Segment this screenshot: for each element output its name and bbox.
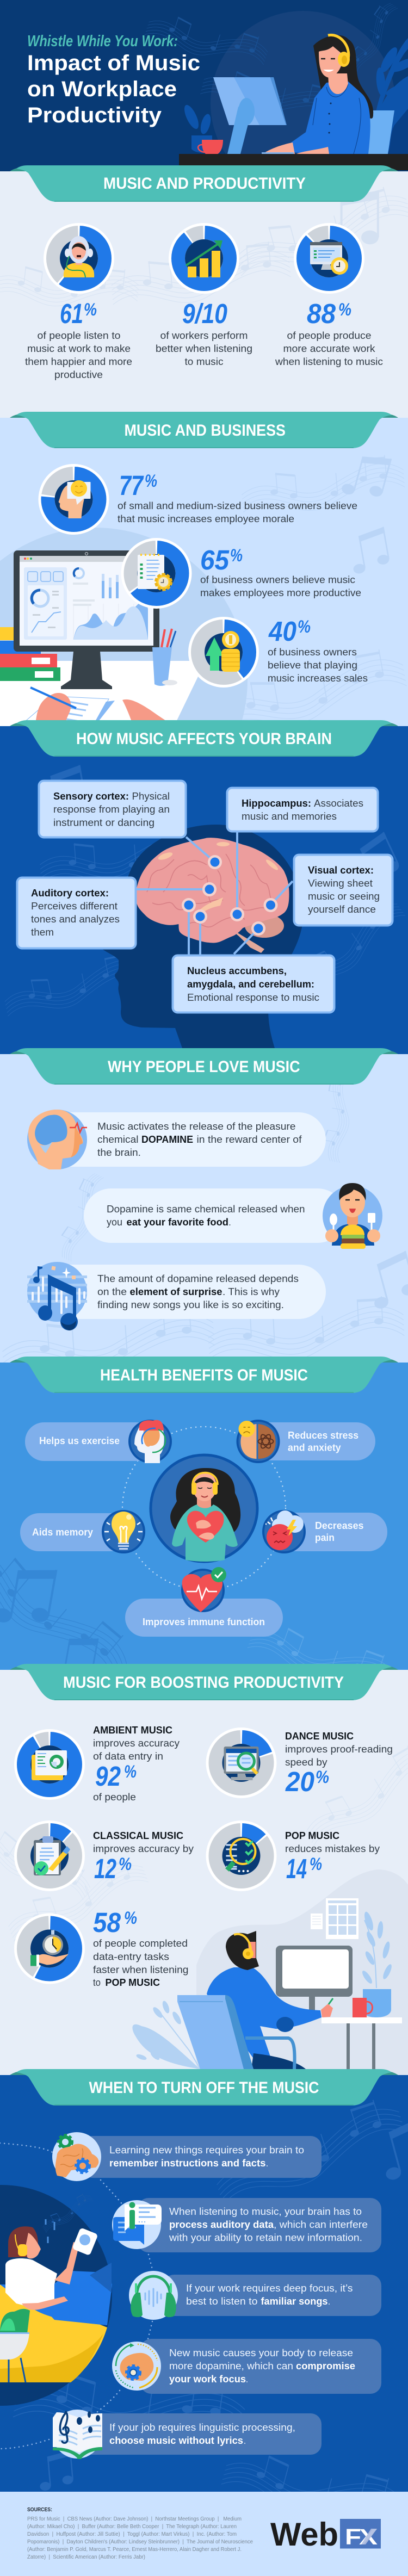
callout: hippocampus [227, 788, 378, 831]
stat: 77 percent: that music increases employee morale [118, 513, 294, 524]
chart: 12 percent donut [14, 1820, 85, 1891]
sources list: (Author: Mikael Cho) | Buffer (Author: Belle Beth Cooper | The Telegraph (Author: Lauren [27, 2523, 237, 2530]
heading: MUSIC FOR BOOSTING PRODUCTIVITY [63, 1674, 344, 1692]
stat: 9 in 10: 9/10 [182, 298, 227, 329]
card: favorite food: . [228, 1217, 231, 1228]
silhouette: head [101, 825, 304, 1048]
card: favorite food: you [107, 1217, 122, 1228]
callout: nucleus accumbens [173, 955, 334, 1013]
heading: HEALTH BENEFITS OF MUSIC [100, 1366, 308, 1384]
card: auditory data: When listening to music, your brain has to [169, 2206, 362, 2217]
pill: aids memory [20, 1513, 129, 1551]
connector lines [137, 832, 293, 955]
panel: header [0, 0, 408, 196]
card: learning new things: . [266, 2158, 268, 2169]
callout: hippocampus: music and memories [242, 811, 337, 822]
text: pop music [285, 1830, 380, 1884]
text: classical music: CLASSICAL MUSIC [93, 1830, 183, 1841]
callout: visual cortex: Viewing sheet [308, 878, 373, 889]
text: 58 percent pop music: data-entry tasks [93, 1952, 169, 1962]
callout: auditory cortex [17, 878, 136, 949]
icon: music notes [27, 1262, 87, 1330]
card: new music: . [246, 2374, 248, 2385]
stat: 65 percent: of business owners believe music [200, 574, 355, 585]
stat: 88 percent: % [338, 300, 351, 319]
card: element of surprise: element of surprise [129, 1286, 222, 1297]
sources list [27, 2516, 253, 2560]
text: 58 percent pop music: of people completed [93, 1938, 188, 1949]
illustration: woman at computer [179, 35, 408, 170]
sources list: Popomaronis) | Dayton Children's (Author: Lindsey Steinbrunner) | The Journal of Neuroscience [27, 2538, 253, 2545]
card: auditory data: process auditory data [169, 2219, 274, 2230]
illustration: brain [138, 839, 288, 953]
stat: 77 percent [118, 470, 357, 524]
card: element of surprise [33, 1265, 326, 1319]
callout: hippocampus: Associates [314, 798, 363, 809]
callout: auditory cortex: tones and analyzes [31, 914, 120, 925]
stat: 88 percent: more accurate work [283, 343, 376, 354]
chart: 92 percent donut [14, 1729, 85, 1800]
text: ambient music: of data entry in [93, 1751, 163, 1762]
callout: visual cortex [294, 855, 393, 926]
text: 58 percent pop music: faster when listening [93, 1965, 188, 1976]
text: dance music: 20 [285, 1766, 314, 1797]
logo: WebFX: F [345, 2524, 361, 2549]
text: ambient music: AMBIENT MUSIC [93, 1725, 172, 1736]
sources list: Zatorre) | Scientific American (Author: Ferris Jabr) [27, 2554, 145, 2560]
text: dance music: speed by [285, 1757, 327, 1768]
card: new music: your work focus [169, 2374, 246, 2385]
card: dopamine [33, 1112, 326, 1167]
callout: sensory cortex [39, 781, 186, 838]
illustration: woman in bean bag [0, 2185, 112, 2406]
icon: music book [53, 2410, 102, 2459]
chart: 40 percent donut [188, 617, 259, 688]
sources list: (Author: Benjamin P. Gold, Marcus T. Pearce, Ernest Mas-Herrero, Alain Dagher and Robert J. [27, 2546, 242, 2553]
text: ambient music: improves accuracy [93, 1738, 180, 1749]
callout: auditory cortex: them [31, 927, 54, 938]
chart: 61 percent donut [44, 223, 114, 294]
heading [10, 1357, 398, 1393]
illustration: man at desk [132, 1898, 402, 2069]
illustration: desk with monitor [0, 550, 206, 726]
stat: 9 in 10: better when listening [156, 343, 252, 354]
logo: WebFX: X [359, 2524, 378, 2549]
stat: 61 percent: productive [54, 369, 103, 380]
card: dopamine: chemical [97, 1134, 138, 1145]
heading: HOW MUSIC AFFECTS YOUR BRAIN [76, 730, 332, 748]
heading [10, 720, 398, 757]
text: dance music: improves proof-reading [285, 1744, 393, 1755]
icon: brain in head [129, 1420, 171, 1463]
icon: light bulb [103, 1511, 144, 1552]
icon: pain face [263, 1510, 305, 1552]
pill: decreases pain: Decreases [315, 1520, 363, 1531]
card: deep focus: . [328, 2296, 330, 2307]
callout: sensory cortex: instrument or dancing [53, 817, 154, 828]
text: pop music: POP MUSIC [285, 1830, 339, 1841]
card: new music: New music causes your body to release [169, 2348, 353, 2358]
heading [10, 2069, 398, 2106]
card: element of surprise: The amount of dopamine released depends [97, 1273, 299, 1284]
text: 58 percent pop music: to [93, 1977, 101, 1988]
logo: WebFX: Web [270, 2516, 338, 2553]
text: 58 percent pop music: 58 [93, 1907, 121, 1938]
card: favorite food [84, 1188, 345, 1243]
card: deep focus: best to listen to [186, 2296, 258, 2307]
card: dopamine: Music activates the release of the pleasure [97, 1121, 296, 1132]
card: new music: compromise [296, 2361, 355, 2371]
card: auditory data: , which can interfere [274, 2219, 368, 2230]
text: dance music [285, 1731, 393, 1797]
callout: sensory cortex: Physical [132, 791, 170, 802]
stat: 65 percent: makes employees more productive [200, 587, 361, 598]
stat: 61 percent: music at work to make [27, 343, 131, 354]
dotted connector [0, 2143, 152, 2449]
callout: nucleus accumbens: Emotional response to music [187, 992, 319, 1003]
text: pop music: % [310, 1854, 322, 1874]
heading: WHY PEOPLE LOVE MUSIC [108, 1058, 300, 1076]
panel: when to turn off the music [0, 2069, 408, 2535]
pill: helps us exercise: Helps us exercise [39, 1435, 120, 1446]
stat: 61 percent: of people listen to [37, 330, 121, 341]
heading [10, 1048, 398, 1085]
callout: visual cortex: Visual cortex: [308, 865, 374, 876]
heading: MUSIC AND PRODUCTIVITY [103, 175, 306, 193]
stat: 9 in 10: of workers perform [160, 330, 248, 341]
icon: brain with arrows [112, 2342, 161, 2391]
chart: 20 percent donut [206, 1727, 276, 1798]
title: on Workplace [27, 77, 177, 101]
text: classical music: 12 [94, 1853, 116, 1884]
pill: reduces stress: Reduces stress [288, 1430, 358, 1441]
panel: music for boosting productivity [0, 1664, 408, 2075]
title: Productivity [27, 103, 162, 127]
panel: why people love music [0, 1048, 408, 1379]
callout: hippocampus: Hippocampus: [242, 798, 311, 809]
card: dopamine: in the reward center of [197, 1134, 302, 1145]
icon: heart with check [182, 1567, 226, 1612]
illustration: woman with heart [151, 1455, 257, 1562]
stat: 77 percent: 77 [119, 470, 144, 501]
panel: sources footer [0, 2492, 408, 2576]
heading: WHEN TO TURN OFF THE MUSIC [89, 2079, 319, 2097]
text: classical music: % [119, 1854, 132, 1874]
dotted ring [122, 1427, 286, 1590]
stat: 77 percent: % [145, 471, 157, 491]
icon: head with pulse [27, 1110, 87, 1169]
callout: visual cortex: music or seeing [308, 891, 380, 902]
chart: 77 percent donut [38, 464, 109, 535]
stat: 61 percent: 61 [60, 298, 83, 329]
text: ambient music: of people [93, 1792, 136, 1803]
heading [10, 412, 398, 448]
card: new music [140, 2339, 381, 2394]
card: auditory data [138, 2198, 381, 2252]
pill: improves immune function [125, 1599, 283, 1637]
text: ambient music: % [124, 1762, 137, 1781]
brain markers [182, 855, 277, 936]
text: dance music: DANCE MUSIC [285, 1731, 354, 1742]
stat: 88 percent [275, 298, 383, 367]
pill: decreases pain [277, 1513, 387, 1551]
pill: reduces stress: and anxiety [288, 1442, 341, 1453]
text: pop music: reduces mistakes by [285, 1843, 380, 1854]
card: dopamine: the brain. [97, 1147, 141, 1158]
pill: helps us exercise [25, 1422, 156, 1461]
stat: 88 percent: when listening to music [275, 356, 383, 367]
stat: 88 percent: of people produce [287, 330, 371, 341]
card: linguistic processing: If your job requires linguistic processing, [109, 2422, 295, 2433]
stat: 40 percent: % [298, 617, 311, 636]
callout: nucleus accumbens: amygdala, and cerebellum: [187, 979, 314, 990]
stat: 40 percent: believe that playing [268, 660, 357, 671]
stat: 40 percent: music increases sales [268, 673, 368, 684]
stat: 9 in 10 [156, 298, 252, 367]
card: dopamine: DOPAMINE [141, 1134, 193, 1145]
card: linguistic processing: choose music without lyrics [109, 2435, 243, 2446]
sources heading: SOURCES: [27, 2506, 52, 2513]
chart: 65 percent donut [121, 538, 191, 609]
sources list: Davidson | Huffpost (Author: Jill Suttie) | Toggl (Author: Mart Virkus) | Inc. (Author: Tom [27, 2531, 237, 2537]
callout: auditory cortex: Perceives different [31, 901, 118, 912]
card: favorite food: Dopamine is same chemical released when [107, 1204, 305, 1215]
card: learning new things [82, 2136, 322, 2178]
card: deep focus: familiar songs [261, 2296, 327, 2307]
card: learning new things: Learning new things requires your brain to [109, 2145, 304, 2156]
text: 58 percent pop music: % [124, 1908, 137, 1928]
card: favorite food: eat your favorite food [126, 1217, 228, 1228]
heading [10, 165, 398, 202]
chart: 88 percent donut [294, 223, 364, 294]
stat: 40 percent: of business owners [268, 647, 357, 658]
panel: health benefits of music [0, 1357, 408, 1701]
pill: reduces stress [245, 1422, 375, 1460]
chart: 58 percent donut [14, 1914, 85, 1984]
icon: man eating burger [323, 1183, 382, 1249]
callout: auditory cortex: Auditory cortex: [31, 888, 109, 899]
card: element of surprise: on the [97, 1286, 127, 1297]
text: 58 percent pop music: POP MUSIC [106, 1977, 160, 1988]
stat: 9 in 10: to music [185, 356, 223, 367]
card: learning new things: remember instructions and facts [109, 2158, 265, 2169]
logo: WebFX [270, 2516, 381, 2553]
callout: sensory cortex: Sensory cortex: [53, 791, 129, 802]
panel: music and business [0, 412, 408, 832]
pill: decreases pain: pain [315, 1532, 335, 1543]
sources list: PRS for Music | CBS News (Author: Dave Johnson) | Northstar Meetings Group | Medium [27, 2516, 242, 2522]
stat: 77 percent: of small and medium-sized business owners believe [118, 500, 357, 511]
icon: brain and gears [52, 2132, 101, 2181]
chart: 9 in 10 donut [169, 223, 239, 294]
text: pop music: 14 [286, 1853, 307, 1884]
stat: 61 percent: them happier and more [25, 356, 132, 367]
title: Impact of Music [27, 51, 200, 75]
stat: 40 percent: 40 [268, 616, 296, 647]
card: linguistic processing: . [244, 2435, 246, 2446]
callout: sensory cortex: response from playing an [53, 804, 170, 815]
card: deep focus [163, 2275, 381, 2316]
card: linguistic processing [82, 2413, 322, 2455]
chart: 14 percent donut [206, 1820, 276, 1891]
icon: headphones [129, 2271, 178, 2320]
stat: 40 percent [268, 616, 368, 684]
callout: nucleus accumbens: Nucleus accumbens, [187, 965, 287, 976]
stat: 61 percent: % [84, 300, 97, 319]
pill: aids memory: Aids memory [32, 1527, 93, 1538]
pill: improves immune function: Improves immune function [143, 1617, 265, 1627]
panel: how music affects your brain [0, 720, 408, 1054]
stat: 65 percent [200, 544, 361, 598]
title [27, 51, 200, 127]
card: element of surprise: finding new songs you like is so exciting. [97, 1299, 284, 1310]
card: deep focus: If your work requires deep focus, it’s [186, 2283, 353, 2294]
icon: brain with tangle [237, 1421, 279, 1462]
text: ambient music: 92 [95, 1761, 121, 1792]
text: 58 percent pop music [93, 1907, 188, 1988]
stat: 61 percent [25, 298, 132, 380]
text: dance music: % [316, 1767, 329, 1787]
stat: 65 percent: 65 [200, 544, 230, 575]
panel: music and productivity [0, 165, 408, 418]
heading: MUSIC AND BUSINESS [124, 422, 286, 439]
card: new music: more dopamine, which can [169, 2361, 293, 2371]
stat: 65 percent: % [230, 546, 243, 565]
backdrop blob [196, 1869, 408, 2075]
icon: chat bubbles [112, 2200, 162, 2249]
card: auditory data: with your ability to retain new information. [169, 2232, 362, 2243]
text: classical music: improves accuracy by [93, 1843, 194, 1854]
title: eyebrow: Whistle While You Work: [27, 33, 178, 50]
card: element of surprise: . This is why [222, 1286, 280, 1297]
heading [10, 1664, 398, 1700]
stat: 88 percent: 88 [307, 298, 336, 329]
text: ambient music [93, 1725, 180, 1803]
text: classical music [93, 1830, 194, 1884]
callout: visual cortex: yourself dance [308, 904, 376, 915]
